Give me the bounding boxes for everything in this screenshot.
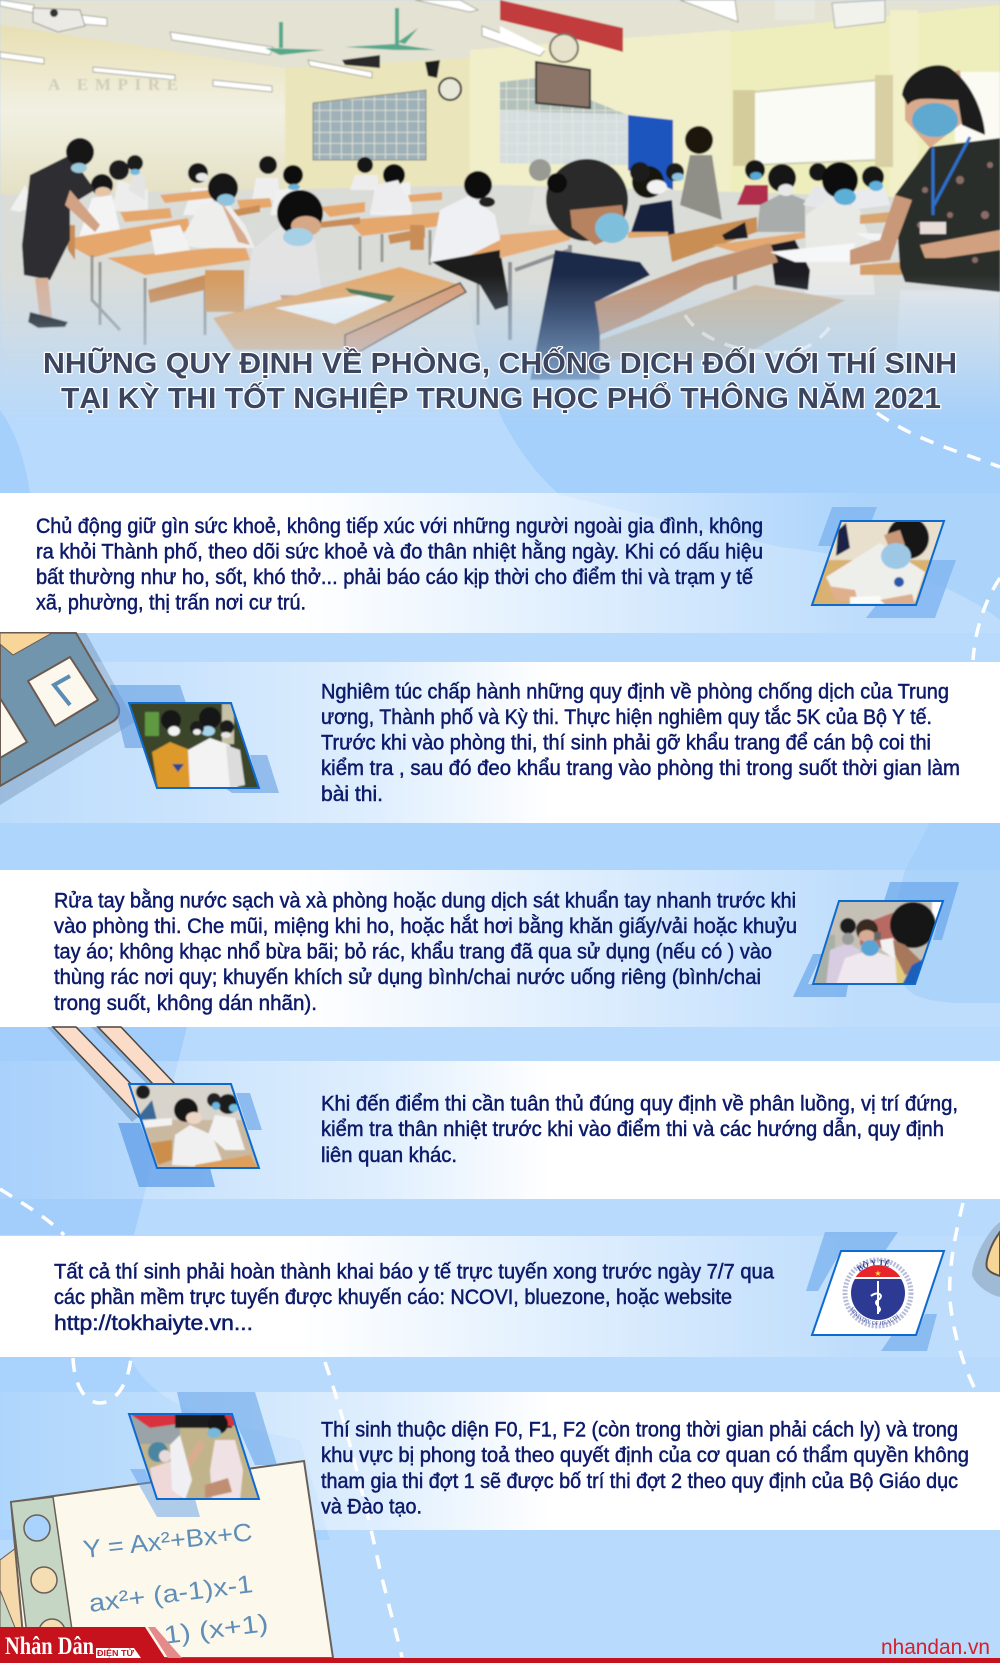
rulers decoration <box>47 1027 175 1122</box>
text: rule 4: kiểm tra thân nhiệt trước khi vào điểm thi và các hướng dẫn, quy định <box>321 1116 944 1141</box>
text: rule 6 <box>321 1418 969 1518</box>
boy in front, right <box>530 159 845 380</box>
text: rule 6: tham gia thi đợt 1 sẽ được bố trí thi đợt 2 theo quy định của Bộ Giáo dục <box>321 1469 958 1493</box>
text: rule 1 <box>36 514 763 614</box>
text: rule 3: vào phòng thi. Che mũi, miệng khi ho, hoặc hắt hơi bằng khăn giấy/vải hoặc khuỷu <box>54 913 797 938</box>
background students left <box>10 155 412 245</box>
text: rule 4 <box>321 1092 958 1167</box>
text: rule 3: thùng rác nơi quy; khuyến khích sử dụng bình/chai nước uống riêng (bình/chai <box>54 965 761 989</box>
text: rule 5 <box>54 1260 774 1335</box>
text: rule 2 <box>321 680 960 806</box>
panel 4 band <box>0 1061 1000 1199</box>
image card 5: Ministry of Health logo: MINISTRY OF HEALTH <box>850 1306 900 1325</box>
image card 5: Ministry of Health logo <box>806 1232 946 1351</box>
text: rule 1: bất thường như ho, sốt, khó thở... phải báo cáo kịp thời cho điểm thi và trạm y tế <box>36 565 753 589</box>
website: nhandan.vn <box>881 1636 990 1659</box>
text: rule 2: ương, Thành phố và Kỳ thi. Thực hiện nghiêm quy tắc 5K của Bộ Y tế. <box>321 704 932 729</box>
title: TẠI KỲ THI TỐT NGHIỆP TRUNG HỌC PHỔ THÔNG NĂM 2021 <box>61 382 941 415</box>
notebook with formulas: ax²+ (a-1)x-1 <box>87 1570 255 1618</box>
text: rule 4: liên quan khác. <box>321 1143 457 1167</box>
text: rule 1: xã, phường, thị trấn nơi cư trú. <box>36 590 306 614</box>
ceiling fans <box>265 8 435 55</box>
papers <box>770 243 855 262</box>
teacher left <box>22 138 100 328</box>
logo: Nhân Dân: ĐIỆN TỬ <box>97 1649 134 1658</box>
teacher right <box>849 64 1000 337</box>
text: rule 6: khu vực bị phong toả theo quyết định của cơ quan có thẩm quyền không <box>321 1443 969 1467</box>
title <box>43 347 957 415</box>
text: rule 4: Khi đến điểm thi cần tuân thủ đúng quy định về phân luồng, vị trí đứng, <box>321 1092 958 1116</box>
panel 3 band <box>0 870 1000 1027</box>
logo: Nhân Dân: Nhân Dân <box>5 1633 94 1660</box>
front desk left <box>213 267 460 350</box>
image card 1: student writing <box>810 507 956 618</box>
logo: Nhân Dân <box>0 1627 182 1660</box>
text: rule 3: tay áo; không khạc nhổ bừa bãi; bỏ rác, khẩu trang đã qua sử dụng (nếu có ) vào <box>54 940 772 964</box>
header photo: exam classroom <box>0 0 1000 430</box>
desks left <box>60 190 500 275</box>
text: rule 3 <box>54 888 797 1015</box>
desks right <box>500 212 902 340</box>
text: rule 6: và Đào tạo. <box>321 1494 422 1518</box>
notebook with formulas <box>0 1461 333 1658</box>
panel 5 band <box>0 1236 1000 1357</box>
panel 1 band <box>0 493 1000 633</box>
calculator body and keys <box>0 633 119 786</box>
text: rule 1: Chủ động giữ gìn sức khoẻ, không tiếp xúc với những người ngoài gia đình, không <box>36 514 763 538</box>
calculator shadow <box>0 633 135 805</box>
image card 5: Ministry of Health logo: ★ <box>874 1269 882 1278</box>
image card 2: students walking <box>110 685 279 793</box>
text: rule 2: Trước khi vào phòng thi, thí sinh phải gỡ khẩu trang để cán bộ coi thi <box>321 731 931 755</box>
image card 4: students seated <box>118 1080 265 1187</box>
background students right <box>528 159 890 295</box>
footer bar <box>0 1658 1000 1663</box>
text: rule 3: Rửa tay bằng nước sạch và xà phòng hoặc dung dịch sát khuẩn tay nhanh trước khi <box>54 888 796 912</box>
text: rule 6: Thí sinh thuộc diện F0, F1, F2 (còn trong thời gian phải cách ly) và trong <box>321 1418 958 1442</box>
faint wall lettering: A EMPIRE <box>48 75 178 94</box>
projector <box>33 8 85 32</box>
panel 2 band <box>0 662 1000 823</box>
image card 6: temperature check outdoors <box>125 1392 277 1517</box>
text: rule 5: Tất cả thí sinh phải hoàn thành khai báo y tế trực tuyến xong trước ngày 7/7 qua <box>54 1260 774 1284</box>
text: rule 2: bài thi. <box>321 782 383 806</box>
notebook with formulas: -1) (x+1) <box>152 1609 270 1651</box>
right-edge decoration: calculator corner <box>972 1222 1000 1297</box>
text: rule 5: các phần mềm trực tuyến được khuyến cáo: NCOVI, bluezone, hoặc website <box>54 1285 732 1309</box>
standing woman <box>680 155 722 220</box>
seated students left <box>150 171 510 310</box>
text: rule 3: trong suốt, không dán nhãn). <box>54 991 317 1015</box>
notebook with formulas: Y = Ax²+Bx+C <box>82 1518 254 1564</box>
windows <box>313 90 426 160</box>
panel 6 band <box>0 1392 1000 1530</box>
text: rule 1: ra khỏi Thành phố, theo dõi sức khoẻ và đo thân nhiệt hằng ngày. Khi có dấu hiệu <box>36 538 763 564</box>
text: rule 2: kiểm tra , sau đó đeo khẩu trang vào phòng thi trong suốt thời gian làm <box>321 756 960 780</box>
image card 5: Ministry of Health logo: BỘ Y TẾ <box>856 1260 890 1272</box>
text: rule 2: Nghiêm túc chấp hành những quy định về phòng chống dịch của Trung <box>321 680 949 704</box>
title: NHỮNG QUY ĐỊNH VỀ PHÒNG, CHỐNG DỊCH ĐỐI VỚI THÍ SINH <box>43 347 957 380</box>
image card 3: temperature check <box>793 882 959 997</box>
text: rule 5: http://tokhaiyte.vn... <box>54 1311 253 1335</box>
ceiling lights <box>0 0 738 92</box>
